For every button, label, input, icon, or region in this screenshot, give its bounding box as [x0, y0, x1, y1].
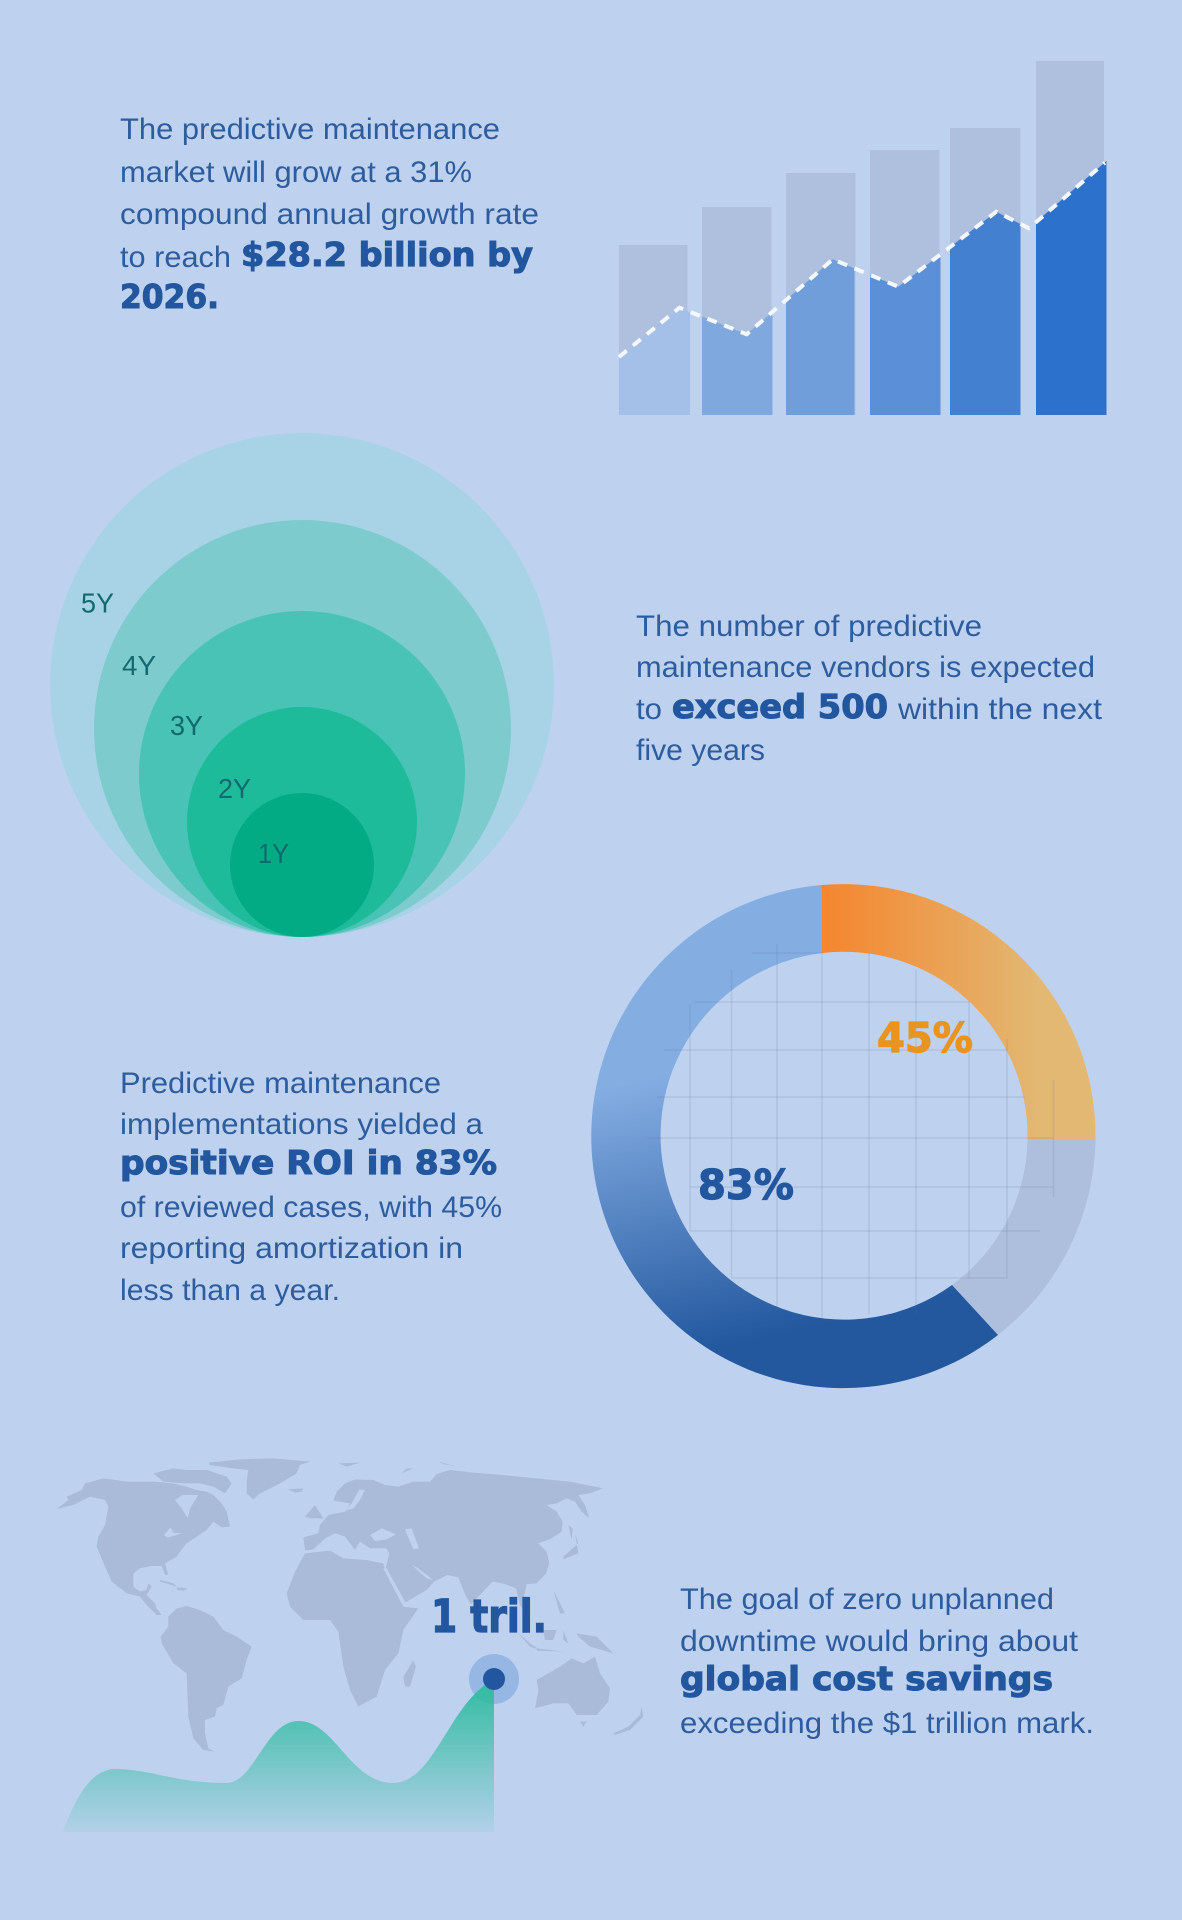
text: ROI statement: less than a year. [120, 1274, 340, 1307]
text: ROI statement: implementations yielded a [120, 1108, 484, 1141]
chart: teal area curve [63, 1680, 494, 1832]
text: vendor statement: to [636, 693, 662, 726]
map: world [57, 1458, 643, 1752]
text: vendor statement: The number of predictive [636, 610, 982, 643]
donut chart: 83% and 45% [591, 884, 1096, 1388]
text: vendor statement: exceed 500 [672, 687, 888, 726]
text: vendor statement: five years [636, 734, 765, 767]
chart: nested circles by year: 1Y [258, 838, 289, 869]
text: ROI statement: Predictive maintenance [120, 1067, 441, 1100]
text: cost savings statement: exceeding the $1 trillion mark. [680, 1707, 1094, 1740]
label: 1 tril.: 1 tril. [431, 1590, 547, 1643]
text: market growth statement: to reach [120, 241, 231, 274]
text: ROI statement: reporting amortization in [120, 1232, 463, 1265]
chart: nested circles by year [50, 433, 554, 937]
callout: location dot [483, 1668, 505, 1690]
text: ROI statement: of reviewed cases, with 45% [120, 1191, 502, 1224]
text: market growth statement: The predictive maintenance [120, 113, 500, 146]
panel: market growth [120, 61, 1106, 415]
text: ROI statement [120, 1067, 502, 1307]
text: market growth statement: compound annual growth rate [120, 198, 539, 231]
text: vendor statement: maintenance vendors is expected [636, 651, 1095, 684]
panel: global cost savings [57, 1458, 1094, 1832]
text: market growth statement: $28.2 billion by [241, 235, 533, 274]
text: market growth statement [120, 113, 539, 316]
label: 83%: 83% [698, 1161, 794, 1209]
panel: vendor growth [50, 433, 1102, 937]
bar chart: growth bars with dashed trend line [619, 61, 1106, 415]
text: vendor statement [636, 610, 1102, 767]
chart: nested circles by year: 3Y [170, 710, 203, 741]
chart: nested circles by year: 5Y [81, 588, 114, 618]
text: ROI statement: positive ROI in 83% [120, 1143, 497, 1182]
label: 45%: 45% [877, 1014, 973, 1062]
text: cost savings statement: downtime would bring about [680, 1625, 1078, 1658]
text: cost savings statement [680, 1583, 1094, 1740]
text: vendor statement: within the next [897, 693, 1102, 726]
text: cost savings statement: The goal of zero unplanned [680, 1583, 1054, 1616]
text: market growth statement: 2026. [120, 277, 219, 316]
chart: nested circles by year: 2Y [218, 773, 251, 804]
callout: location halo [469, 1654, 519, 1704]
text: cost savings statement: global cost savings [680, 1659, 1053, 1698]
chart: nested circles by year: 4Y [122, 650, 156, 681]
panel: return on investment [120, 884, 1096, 1388]
text: market growth statement: market will grow at a 31% [120, 156, 472, 189]
